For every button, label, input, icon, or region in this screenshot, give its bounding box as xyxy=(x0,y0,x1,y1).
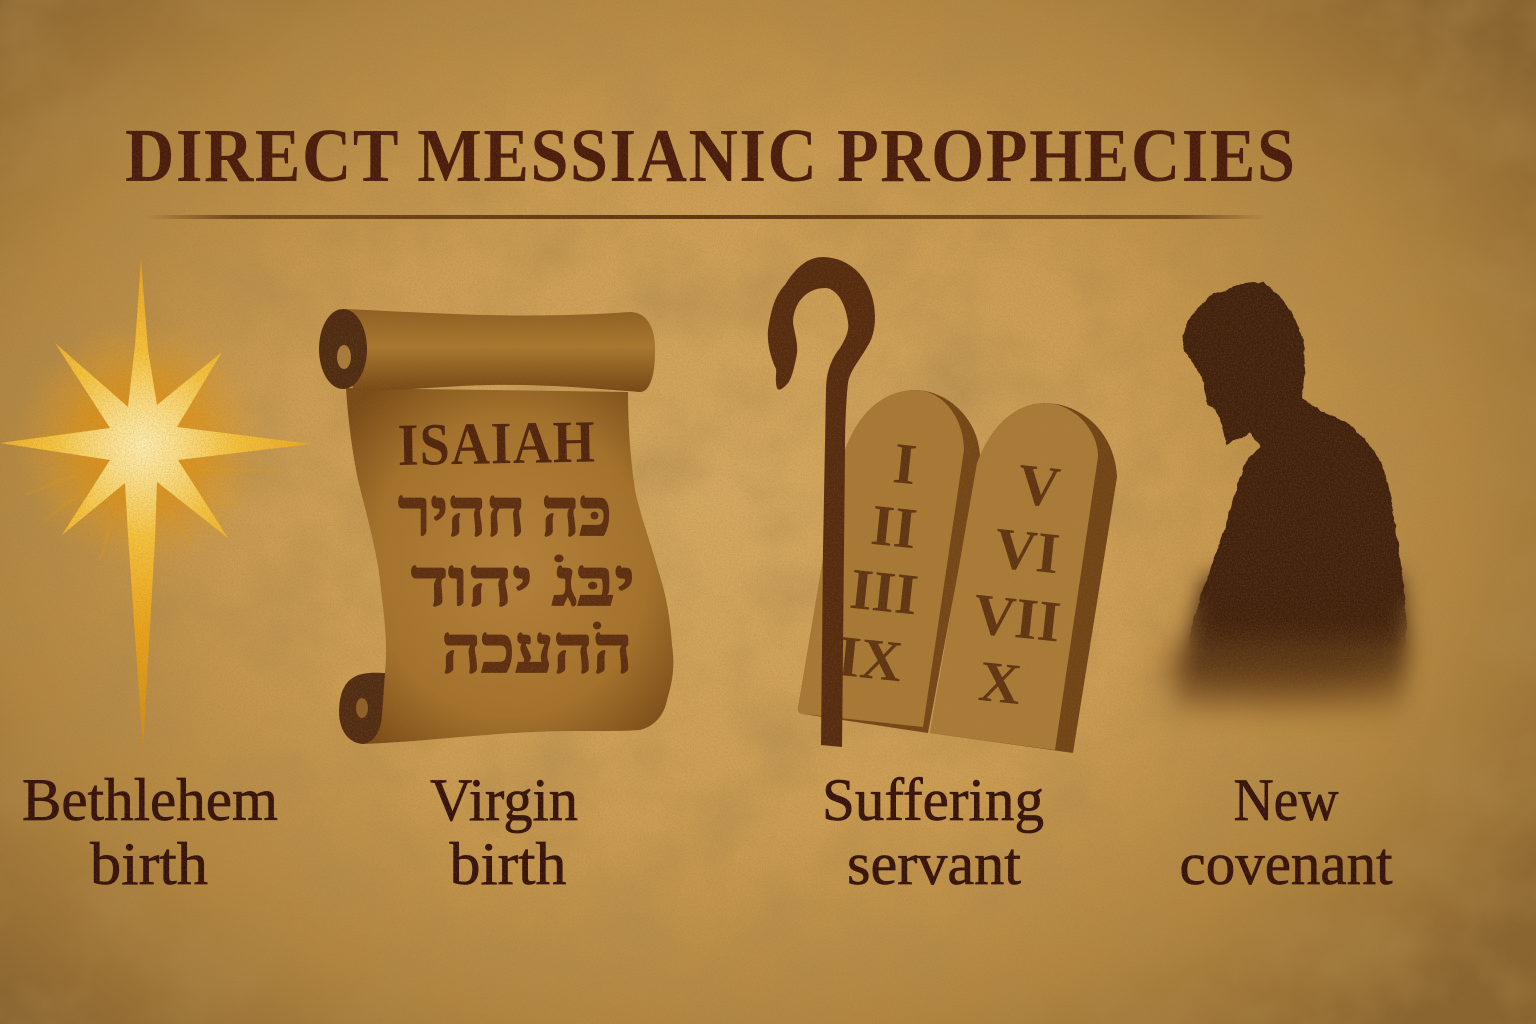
left tablet: I xyxy=(890,430,920,497)
icon: star of Bethlehem xyxy=(0,260,312,750)
label: New covenant xyxy=(1180,767,1393,897)
left tablet: IX xyxy=(835,623,906,694)
figure upper body xyxy=(1182,282,1407,670)
icon: stone tablets and shepherd staff xyxy=(768,257,1117,753)
label: New covenant: New xyxy=(1234,767,1339,833)
top roll xyxy=(343,309,655,392)
outer mist xyxy=(1160,635,1390,695)
top roll end cap xyxy=(319,309,367,389)
icon: bowed figure silhouette xyxy=(1160,282,1408,725)
label: Suffering servant: Suffering xyxy=(822,767,1044,833)
Hebrew line 1: כּה חהיר xyxy=(398,477,612,550)
right tablet: VII xyxy=(970,581,1064,654)
right tablet: X xyxy=(976,648,1024,717)
left tablet xyxy=(798,390,980,733)
label: Suffering servant: servant xyxy=(847,831,1021,897)
Hebrew line 2: יבּגֹ יהוד xyxy=(411,546,635,620)
star glow xyxy=(17,320,267,570)
label: Bethlehem birth: birth xyxy=(90,831,208,897)
label: Virgin birth: Virgin xyxy=(430,767,578,833)
right tablet: VI xyxy=(992,515,1062,586)
label: Virgin birth xyxy=(430,767,578,897)
shepherd staff xyxy=(768,257,875,747)
star rays xyxy=(25,370,280,560)
title: DIRECT MESSIANIC PROPHECIES xyxy=(125,114,1295,198)
label: Virgin birth: birth xyxy=(450,831,566,897)
label: Bethlehem birth: Bethlehem xyxy=(22,767,278,833)
label: Bethlehem birth xyxy=(22,767,278,897)
bottom roll end cap xyxy=(339,673,385,744)
right tablet xyxy=(930,403,1117,753)
title divider rule xyxy=(145,215,1265,219)
right tablet: V xyxy=(1015,451,1063,520)
Hebrew line 3: הֹהעכה xyxy=(442,613,632,687)
label: Suffering servant xyxy=(822,767,1044,897)
scroll sheet xyxy=(346,388,673,744)
label: New covenant: covenant xyxy=(1180,831,1393,897)
left tablet: III xyxy=(847,556,921,627)
star body xyxy=(0,260,312,750)
left tablet: II xyxy=(868,492,920,561)
figure lower body dissolving into mist xyxy=(1170,575,1408,725)
scroll heading: ISAIAH xyxy=(397,409,595,479)
icon: Isaiah scroll xyxy=(319,309,673,744)
